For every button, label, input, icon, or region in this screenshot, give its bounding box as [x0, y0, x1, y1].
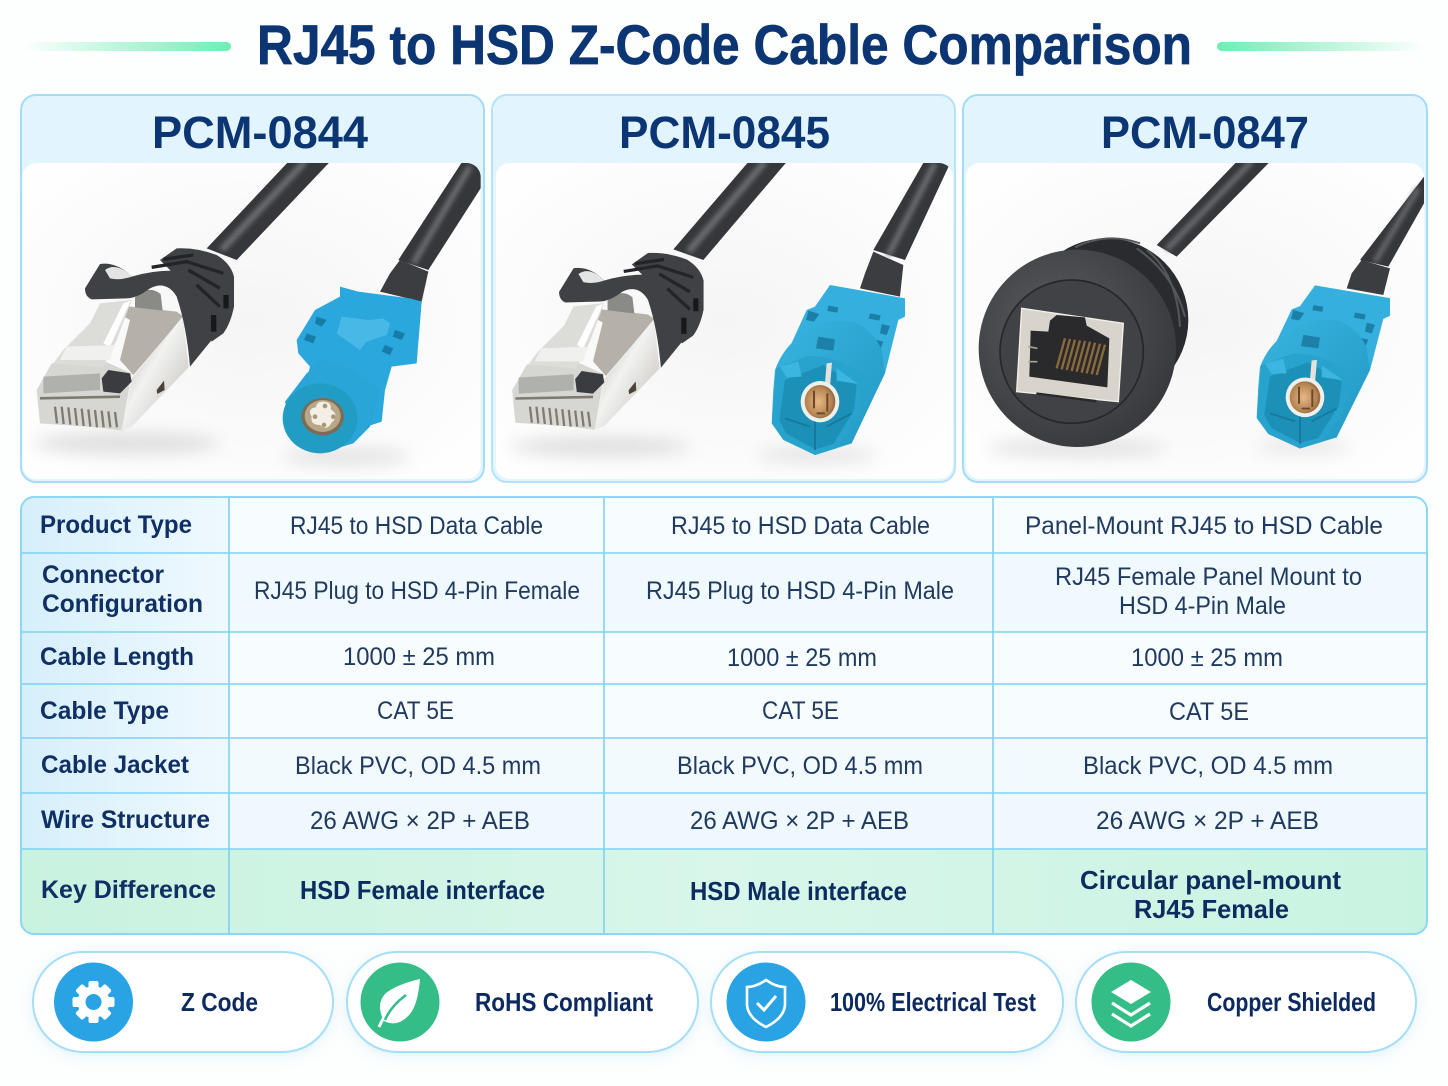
icon: gear	[54, 962, 133, 1042]
row: Cable Jacket: Black PVC, OD 4.5 mm	[677, 752, 923, 780]
row: Connector Configuration	[42, 561, 1362, 620]
badge label: RoHS Compliant	[475, 987, 653, 1017]
badge: Copper Shielded	[1076, 952, 1416, 1052]
row: Connector Configuration: RJ45 Plug to HSD 4-Pin Male	[646, 577, 954, 605]
row: Cable Length: 1000 ± 25 mm	[1131, 644, 1283, 672]
row: Connector Configuration: Configuration	[42, 590, 203, 618]
row: Cable Length: Cable Length	[40, 643, 194, 671]
row: Cable Type: CAT 5E	[762, 697, 839, 725]
panel frame	[492, 95, 955, 482]
row: Key Difference	[41, 865, 1341, 924]
HSD male connector	[1257, 177, 1424, 453]
row: Key Difference: HSD Female interface	[300, 875, 545, 905]
panel: PCM-0845	[492, 95, 955, 482]
row: Product Type: Panel-Mount RJ45 to HSD Cable	[1025, 512, 1383, 540]
badge label: 100% Electrical Test	[830, 987, 1036, 1017]
row: Product Type: Product Type	[40, 511, 192, 539]
RJ45 plug with cable	[33, 160, 332, 455]
panel: PCM-0844	[21, 95, 484, 482]
row: Key Difference: Circular panel-mount	[1080, 865, 1341, 895]
badge: RoHS Compliant	[347, 952, 698, 1052]
badge label: Copper Shielded	[1207, 987, 1376, 1017]
comparison table	[21, 497, 1427, 934]
product photo	[496, 160, 953, 479]
product photo	[966, 160, 1424, 479]
row: Connector Configuration: HSD 4-Pin Male	[1119, 592, 1286, 620]
row: Wire Structure: Wire Structure	[41, 806, 210, 834]
row: Cable Length	[40, 643, 1283, 672]
row: Cable Type	[40, 697, 1249, 726]
row: Product Type: RJ45 to HSD Data Cable	[671, 512, 930, 540]
badge: Z Code	[33, 952, 333, 1052]
row: Product Type: RJ45 to HSD Data Cable	[290, 512, 543, 540]
icon: leaf	[360, 962, 440, 1042]
HSD male connector	[757, 160, 952, 462]
panel: PCM-0847	[963, 95, 1427, 482]
row: Cable Length: 1000 ± 25 mm	[727, 644, 877, 672]
row: Wire Structure: 26 AWG × 2P + AEB	[310, 807, 530, 835]
row: Product Type	[40, 511, 1383, 540]
row: Connector Configuration: RJ45 Plug to HSD 4-Pin Female	[254, 577, 580, 605]
panel heading: PCM-0847	[1101, 107, 1309, 158]
row: Cable Type: Cable Type	[40, 697, 169, 725]
circular panel-mount RJ45	[979, 160, 1272, 456]
row: Connector Configuration: Connector	[42, 561, 164, 589]
HSD female connector	[283, 160, 482, 465]
title rule left	[24, 42, 231, 51]
panel frame	[963, 95, 1427, 482]
row: Wire Structure: 26 AWG × 2P + AEB	[690, 807, 909, 835]
key difference row fill	[21, 849, 1427, 934]
product photo	[22, 160, 482, 479]
title text: RJ45 to HSD Z-Code Cable Comparison	[257, 13, 1192, 76]
row: Cable Jacket: Cable Jacket	[41, 751, 190, 779]
title rule right	[1217, 42, 1424, 51]
table background	[21, 497, 1427, 934]
row: Connector Configuration: RJ45 Female Panel Mount to	[1055, 563, 1362, 591]
icon: shield check	[726, 962, 806, 1042]
icon: layers	[1092, 962, 1170, 1042]
row: Wire Structure: 26 AWG × 2P + AEB	[1096, 807, 1319, 835]
row: Cable Jacket	[41, 751, 1333, 780]
row: Cable Type: CAT 5E	[1169, 698, 1249, 726]
badge: 100% Electrical Test	[711, 952, 1063, 1052]
panel heading: PCM-0844	[152, 107, 368, 158]
row: Cable Jacket: Black PVC, OD 4.5 mm	[295, 752, 541, 780]
RJ45 plug with cable	[510, 160, 788, 457]
row: Cable Jacket: Black PVC, OD 4.5 mm	[1083, 752, 1333, 780]
title	[24, 13, 1424, 76]
row: Key Difference: Key Difference	[41, 876, 216, 904]
row: Key Difference: RJ45 Female	[1134, 894, 1289, 924]
panel heading: PCM-0845	[619, 107, 830, 158]
row: Cable Type: CAT 5E	[377, 697, 454, 725]
row: Cable Length: 1000 ± 25 mm	[343, 643, 495, 671]
row: Wire Structure	[41, 806, 1319, 835]
panel frame	[21, 95, 484, 482]
row: Key Difference: HSD Male interface	[690, 876, 907, 906]
badge label: Z Code	[181, 987, 258, 1017]
